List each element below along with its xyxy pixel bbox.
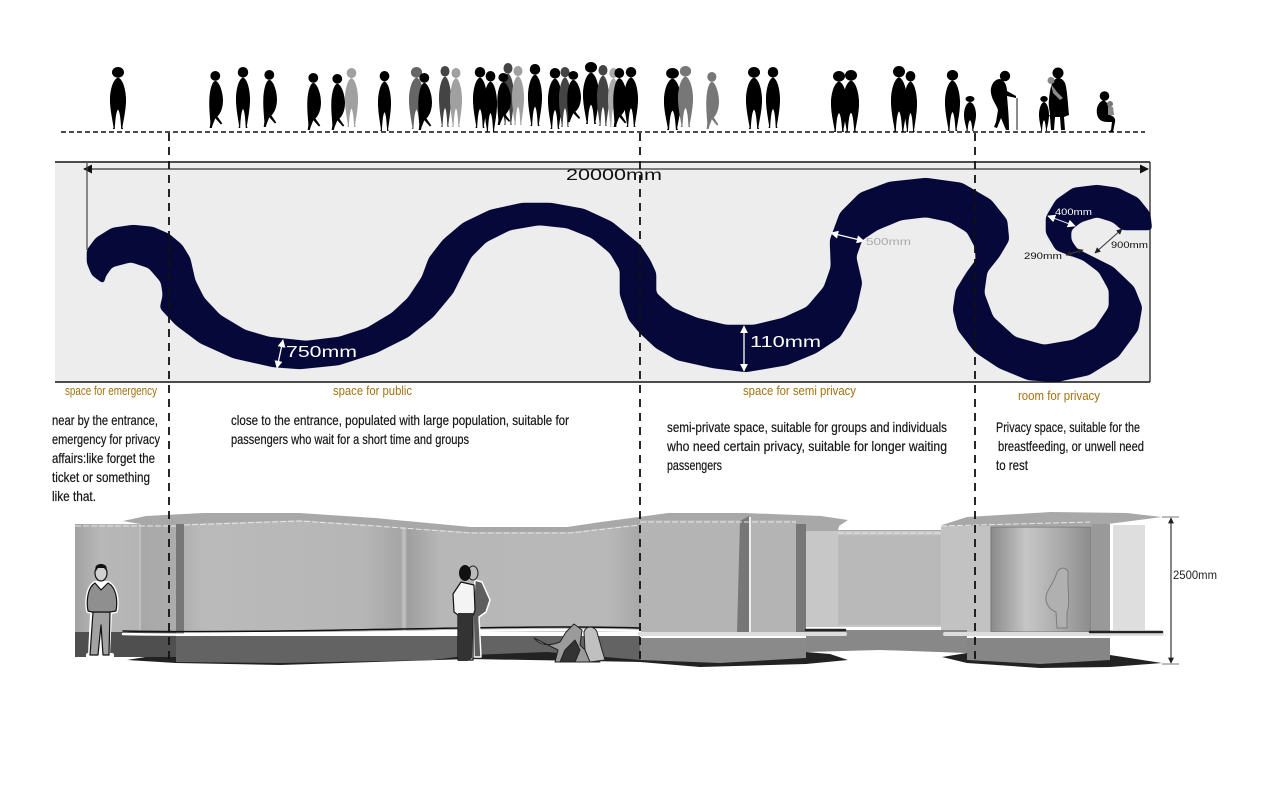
curved wall plan	[87, 178, 1152, 382]
wall: dark edge right	[796, 524, 806, 634]
dimension: 900mm	[1095, 229, 1148, 253]
wall top highlights	[75, 521, 1090, 533]
wall: private right strip	[1092, 524, 1110, 632]
dimension: 500mm: 500mm	[866, 236, 911, 248]
base: speckled semi-private	[640, 638, 806, 663]
people: private zone	[945, 68, 1115, 132]
label: 20000mm: 20000mm	[566, 167, 662, 184]
wall: dark edge	[176, 524, 184, 634]
text: emergency description: emergency for privacy	[52, 431, 160, 447]
text: emergency description: affairs:like forget the	[52, 450, 155, 466]
people: emergency zone	[110, 67, 126, 129]
dimension: 290mm: 290mm	[1024, 251, 1062, 262]
base: timber left	[75, 632, 176, 657]
dimension: 400mm: 400mm	[1055, 207, 1092, 218]
zone divider lines	[169, 133, 975, 662]
pale rear panel	[1113, 525, 1145, 630]
dimension: 500mm	[831, 233, 911, 248]
zone headings	[65, 384, 1101, 403]
text: emergency description	[52, 412, 160, 504]
figures: dog and crouching children	[534, 624, 605, 662]
text: semi-private description: passengers	[667, 457, 722, 473]
people: public zone	[209, 62, 638, 132]
heading: semi privacy: space for semi privacy	[743, 384, 857, 398]
floor shadow: right	[942, 653, 1162, 668]
text: privacy description: breastfeeding, or unwell need	[998, 438, 1144, 454]
text: semi-private description: who need certain privacy, suitable for longer waiting	[666, 438, 947, 454]
heading: public: space for public	[333, 384, 412, 398]
text: emergency description: ticket or something	[52, 469, 150, 485]
text: semi-private description	[666, 419, 947, 473]
wall: recess	[806, 531, 941, 627]
roof canopy	[123, 512, 1162, 532]
wall: recess centre	[838, 535, 941, 625]
height dimension: 2500mm	[1162, 517, 1217, 664]
text: public description: close to the entrance, populated with large population, suitable for	[231, 412, 569, 428]
dimension: 750mm	[277, 340, 357, 368]
lower disc edge	[123, 627, 1162, 635]
base: speckled private	[967, 638, 1110, 664]
height dimension: 2500mm: 2500mm	[1173, 568, 1217, 582]
text: privacy description	[996, 419, 1144, 473]
wall: semi-private segment	[640, 520, 796, 632]
dimension: 110mm	[744, 326, 821, 371]
people: semi-private zone	[664, 66, 917, 132]
dimension: 400mm	[1048, 207, 1092, 226]
wall: private cabin	[991, 527, 1091, 632]
woman with baby	[1048, 68, 1069, 130]
text: public description: passengers who wait for a short time and groups	[231, 431, 469, 447]
heading: private room: room for privacy	[1018, 389, 1101, 403]
wall: partition	[737, 516, 749, 633]
wall: left segment	[75, 524, 176, 632]
base: timber main	[176, 636, 640, 663]
wall: main segment	[184, 520, 640, 632]
person: silhouette in cabin	[1046, 568, 1069, 628]
panel borders	[55, 162, 1150, 382]
text: semi-private description: semi-private space, suitable for groups and individuals	[667, 419, 947, 435]
elder with cane	[991, 71, 1017, 130]
person: man standing left	[87, 564, 117, 657]
base: speckled recess	[806, 630, 967, 653]
elevation drawing	[75, 512, 1217, 668]
width dimension arrow	[84, 168, 1148, 170]
text: emergency description: like that.	[52, 488, 96, 504]
wall: private segment	[941, 526, 1110, 633]
offset dimension line	[86, 163, 88, 250]
dimension: 750mm: 750mm	[286, 344, 357, 361]
heading: emergency: space for emergency	[65, 384, 158, 398]
person: couple standing	[453, 565, 490, 661]
wall: light strip by partition	[749, 517, 751, 633]
floor shadow: left	[127, 652, 848, 667]
ground dashed line	[61, 131, 1145, 133]
text: emergency description: near by the entrance,	[52, 412, 158, 428]
panel background	[55, 163, 1150, 381]
text: privacy description: Privacy space, suitable for the	[996, 419, 1140, 435]
dimension: 110mm: 110mm	[750, 334, 821, 351]
text: privacy description: to rest	[996, 457, 1028, 473]
dimension: 290mm	[1024, 250, 1083, 262]
seated person with child	[1097, 91, 1115, 132]
dimension: 900mm: 900mm	[1111, 240, 1148, 251]
people row	[110, 62, 1115, 132]
text: public description	[231, 412, 569, 447]
plan panel	[55, 162, 1152, 382]
